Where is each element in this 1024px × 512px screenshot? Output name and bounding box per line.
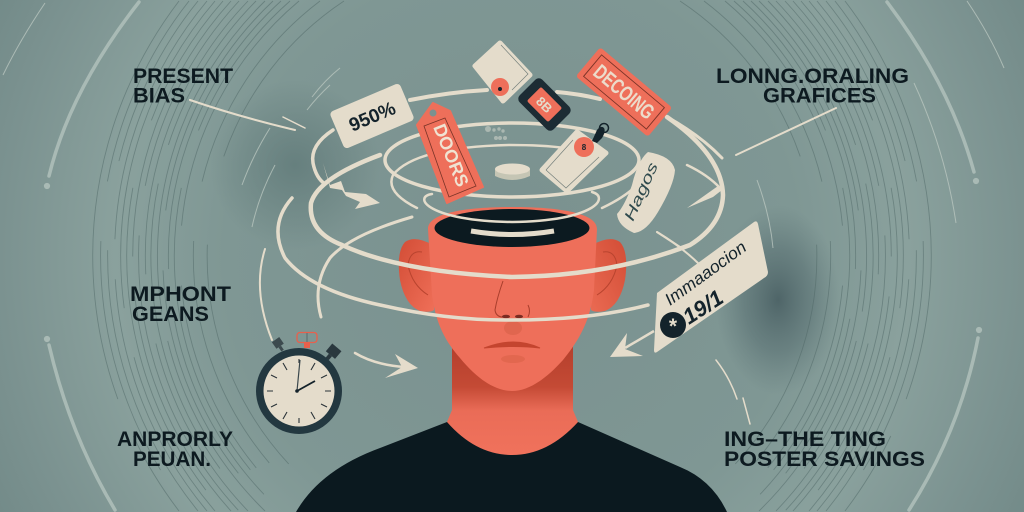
tag: decoing: DECOING bbox=[589, 60, 659, 124]
tag: script bbox=[617, 152, 675, 233]
person: shirt bbox=[296, 422, 727, 512]
callout: information tag: * bbox=[669, 315, 678, 338]
tag: percent bbox=[329, 83, 415, 149]
arrow: callout to head bbox=[610, 331, 654, 357]
label: mphont geans: GEANS bbox=[132, 303, 209, 326]
tag: doors bbox=[417, 103, 483, 203]
swirl bands bbox=[278, 90, 723, 320]
callout: information tag: Immaaocion bbox=[661, 237, 750, 309]
label: present bias: BIAS bbox=[133, 84, 185, 108]
label: anprorly peuan: PEUAN. bbox=[133, 448, 211, 471]
label: longoraling grafices: GRAFICES bbox=[763, 84, 876, 108]
tag: script: Hagos bbox=[621, 159, 662, 224]
tag: dark small: 8B bbox=[533, 94, 555, 116]
arrow: stopwatch to head bbox=[355, 353, 418, 378]
callout: information tag bbox=[654, 221, 768, 353]
person: face features bbox=[484, 281, 540, 363]
person: right ear bbox=[591, 239, 626, 312]
leader lines bbox=[190, 100, 836, 424]
tag: percent: 950% bbox=[346, 98, 399, 137]
label: mphont geans: MPHONT bbox=[130, 283, 231, 306]
label: present bias bbox=[133, 65, 233, 108]
arrow: right swirl head bbox=[687, 186, 722, 208]
label: anprorly peuan: ANPRORLY bbox=[117, 428, 233, 451]
tag: decoing bbox=[576, 47, 672, 137]
label: ing the ting poster savings: POSTER SAVINGS bbox=[724, 448, 925, 471]
person: head bbox=[428, 207, 597, 391]
icon: stopwatch bbox=[256, 332, 342, 434]
tag: blank cream bbox=[475, 43, 530, 101]
callout: information tag: 19/1 bbox=[678, 285, 728, 329]
tag: doors: DOORS bbox=[429, 121, 473, 190]
label: longoraling grafices: LONNG.ORALING bbox=[716, 65, 909, 88]
small dots bbox=[485, 126, 507, 140]
tag: dark small bbox=[516, 76, 573, 133]
person: neck bbox=[447, 345, 578, 455]
label: present bias: PRESENT bbox=[133, 65, 233, 88]
tag: cream with clasp bbox=[542, 124, 608, 191]
label: longoraling grafices bbox=[716, 65, 909, 108]
person: left ear bbox=[399, 239, 434, 312]
label: mphont geans bbox=[130, 283, 231, 326]
tag: cream with clasp: 8 bbox=[582, 143, 587, 152]
pill bbox=[495, 164, 530, 180]
label: anprorly peuan bbox=[117, 428, 233, 471]
label: ing the ting poster savings: ING–THE TING bbox=[724, 428, 886, 451]
person: open skull bbox=[434, 209, 590, 247]
label: ing the ting poster savings bbox=[724, 428, 925, 471]
thin accent lines bbox=[3, 1, 1004, 248]
arrow: lightning swirl bbox=[323, 163, 380, 209]
